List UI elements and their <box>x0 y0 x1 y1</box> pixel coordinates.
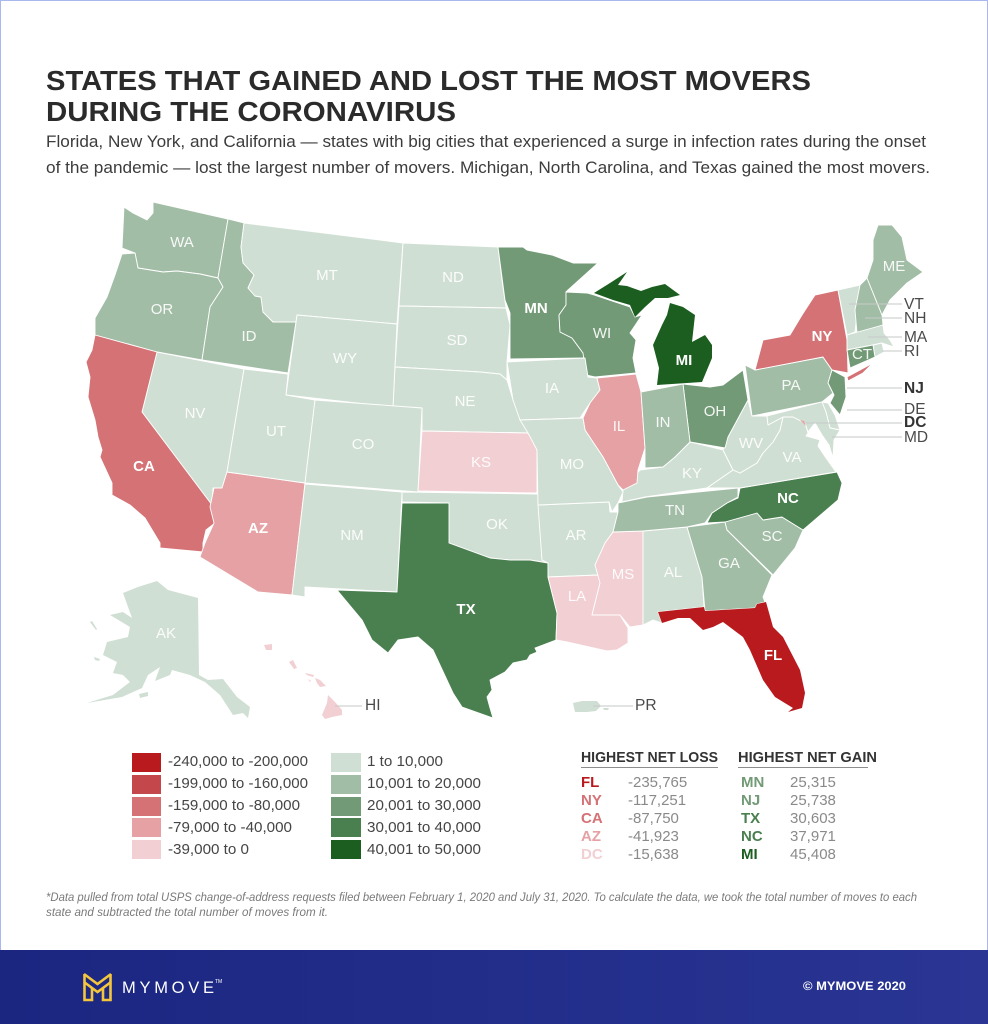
state name labels: MT <box>316 267 338 284</box>
legend: net gain scale: 30,001 to 40,000 <box>367 819 481 836</box>
legend: net loss scale: -79,000 to -40,000 <box>168 819 292 836</box>
table: highest net loss: -15,638 <box>628 846 679 863</box>
subtitle text block: Florida, New York, and California — states with big cities that experienced a surge in infection rates during the onset <box>46 132 926 151</box>
legend: net loss scale: -240,000 to -200,000 <box>168 753 308 770</box>
state name labels: OK <box>486 516 508 533</box>
state name labels: CA <box>133 458 155 475</box>
state name labels: SD <box>447 332 468 349</box>
callouts: small state labels: MD <box>904 429 928 446</box>
table: highest net loss: FL <box>581 774 599 791</box>
state name labels <box>133 234 905 664</box>
state name labels: NC <box>777 490 799 507</box>
state name labels: UT <box>266 423 286 440</box>
footnote: *Data pulled from total USPS change-of-address requests filed between February 1, 2020 and July 31, 2020. To calculate the data, we took the total number of moves to each <box>46 892 917 904</box>
table: highest net gain: 25,738 <box>790 792 836 809</box>
state name labels: AK <box>156 625 176 642</box>
title: DURING THE CORONAVIRUS <box>46 96 456 127</box>
state name labels: OH <box>704 403 726 420</box>
legend: net loss scale: -199,000 to -160,000 <box>168 775 308 792</box>
callouts: small state labels: VT <box>904 296 924 313</box>
state name labels: FL <box>764 647 782 664</box>
state name labels: NE <box>455 393 475 410</box>
legend: net loss scale <box>132 753 308 859</box>
us map <box>86 202 923 719</box>
state name labels: WI <box>593 325 611 342</box>
table: highest net gain: NC <box>741 828 763 845</box>
state name labels: CO <box>352 436 374 453</box>
state name labels: AL <box>664 564 682 581</box>
state name labels: VA <box>783 449 801 466</box>
table: highest net gain: TX <box>741 810 760 827</box>
table: highest net loss: -41,923 <box>628 828 679 845</box>
table: highest net gain: MI <box>741 846 758 863</box>
state name labels: IN <box>656 414 670 431</box>
table: highest net loss: -87,750 <box>628 810 679 827</box>
legend: net gain scale: 40,001 to 50,000 <box>367 841 481 858</box>
footnote: state and subtracted the total number of moves from it. <box>46 907 328 919</box>
callouts: small state labels <box>335 296 928 714</box>
subtitle text block <box>46 132 930 177</box>
table: highest net gain: 37,971 <box>790 828 836 845</box>
state name labels: MN <box>524 300 548 317</box>
table: highest net loss: -235,765 <box>628 774 687 791</box>
legend: net loss scale: -159,000 to -80,000 <box>168 797 300 814</box>
table: highest net loss: CA <box>581 810 603 827</box>
table: highest net gain: MN <box>741 774 764 791</box>
table: highest net loss: NY <box>581 792 602 809</box>
legend: net loss scale: -39,000 to 0 <box>168 841 249 858</box>
state name labels: WV <box>739 435 763 452</box>
table: highest net loss: AZ <box>581 828 601 845</box>
callouts: small state labels: MA <box>904 329 928 346</box>
table: highest net loss: DC <box>581 846 603 863</box>
icon: mymove logo <box>84 974 111 1000</box>
footer band <box>0 950 988 1024</box>
table: highest net loss <box>581 749 718 863</box>
legend: net gain scale: 10,001 to 20,000 <box>367 775 481 792</box>
callouts: small state labels: PR <box>635 697 657 714</box>
state name labels: KS <box>471 454 491 471</box>
state: Alaska <box>87 581 250 718</box>
state name labels: MO <box>560 456 584 473</box>
state name labels: GA <box>718 555 740 572</box>
callouts: small state labels: DC <box>904 414 926 431</box>
callouts: small state labels: HI <box>365 697 380 714</box>
state name labels: IL <box>613 418 625 435</box>
state name labels: SC <box>762 528 783 545</box>
trademark: TM <box>215 979 222 985</box>
state name labels: NM <box>340 527 364 544</box>
state name labels: CT <box>852 346 872 363</box>
state name labels: ND <box>442 269 464 286</box>
logo wordmark: MYMOVE <box>122 979 214 997</box>
table: highest net gain: 25,315 <box>790 774 836 791</box>
callouts: small state labels: RI <box>904 343 920 360</box>
state name labels: MI <box>676 352 692 369</box>
icon: DC marker <box>800 420 806 426</box>
state name labels: TN <box>665 502 685 519</box>
state name labels: WY <box>333 350 357 367</box>
state name labels: AZ <box>248 520 268 537</box>
state name labels: TX <box>456 601 476 618</box>
state name labels: ME <box>883 258 905 275</box>
callouts: small state labels: NJ <box>904 380 924 397</box>
callouts: small state labels: NH <box>904 310 926 327</box>
state name labels: NV <box>185 405 205 422</box>
state name labels: AR <box>566 527 587 544</box>
state name labels: IA <box>545 380 559 397</box>
table: highest net gain: 45,408 <box>790 846 836 863</box>
callouts: small state labels: DE <box>904 401 926 418</box>
state: Hawaii <box>264 644 342 719</box>
state shapes <box>86 202 923 718</box>
state name labels: ID <box>242 328 257 345</box>
state name labels: KY <box>682 465 702 482</box>
state: Puerto Rico <box>573 701 609 712</box>
title: STATES THAT GAINED AND LOST THE MOST MOVERS <box>46 65 811 96</box>
subtitle text block: of the pandemic — lost the largest number of movers. Michigan, North Carolina, and Texas gained the most movers. <box>46 158 930 177</box>
state name labels: OR <box>151 301 173 318</box>
state name labels: LA <box>568 588 586 605</box>
state name labels: NY <box>812 328 832 345</box>
footnote <box>46 892 917 919</box>
legend: net gain scale: 20,001 to 30,000 <box>367 797 481 814</box>
legend: net gain scale <box>331 753 481 859</box>
table: highest net gain <box>738 749 877 863</box>
table: highest net gain: NJ <box>741 792 760 809</box>
state name labels: PA <box>782 377 800 394</box>
table: highest net gain: 30,603 <box>790 810 836 827</box>
table: highest net gain: HIGHEST NET GAIN <box>738 749 877 766</box>
title <box>46 65 811 127</box>
state name labels: MS <box>612 566 634 583</box>
copyright: © MYMOVE 2020 <box>803 981 906 993</box>
state name labels: WA <box>170 234 194 251</box>
table: highest net loss: -117,251 <box>628 792 686 809</box>
table: highest net loss: HIGHEST NET LOSS <box>581 749 718 766</box>
legend: net gain scale: 1 to 10,000 <box>367 753 443 770</box>
